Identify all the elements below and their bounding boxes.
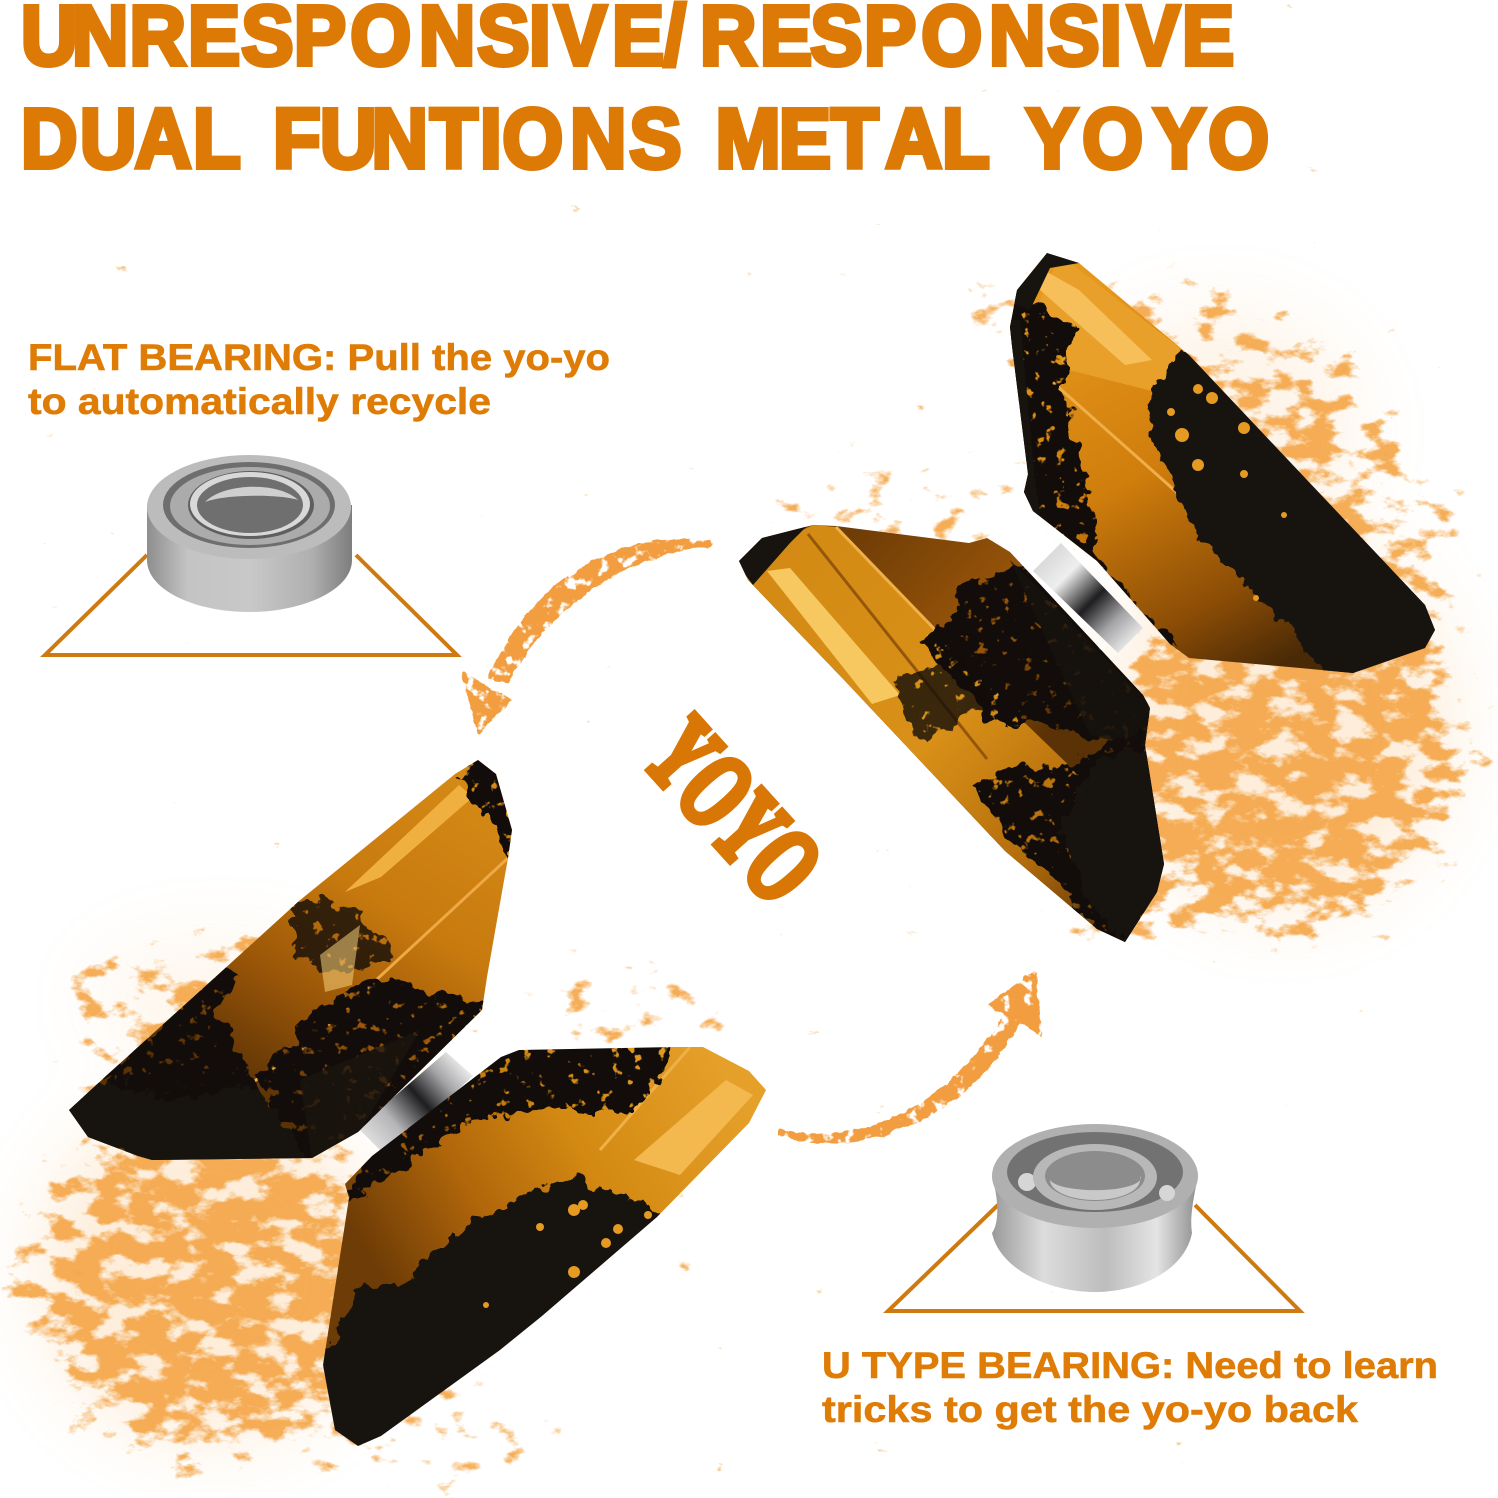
text: U type bearing description: [822, 1345, 1438, 1430]
icon: flat bearing: [147, 455, 352, 612]
text: U type bearing description: tricks to get the yo-yo back: [822, 1389, 1358, 1430]
text: flat bearing description: FLAT BEARING: Pull the yo-yo: [28, 337, 610, 378]
icon: U type bearing: [992, 1124, 1198, 1292]
arrow: upper circular arrow: [462, 539, 712, 735]
front half: [739, 525, 1164, 942]
triangle: U bearing stand: [888, 1205, 1300, 1311]
triangle: flat bearing stand: [45, 555, 457, 655]
orange wash behind splashes: [40, 310, 1450, 1440]
arrow: lower circular arrow: [778, 968, 1042, 1143]
yoyo: bottom left: [60, 750, 780, 1455]
text: flat bearing description: [28, 337, 610, 422]
title: DUAL FUNTIONS METAL YOYO: [21, 93, 1269, 186]
orange splash: bottom left: [20, 920, 740, 1490]
axle: [358, 1052, 473, 1156]
orange splash: top right: [750, 240, 1475, 960]
yoyo: top right: [730, 240, 1450, 955]
title: [21, 0, 1269, 186]
axle: [1033, 543, 1143, 653]
text: flat bearing description: to automatically recycle: [28, 381, 491, 422]
text: U type bearing description: U TYPE BEARING: Need to learn: [822, 1345, 1438, 1386]
back half: [1000, 240, 1450, 680]
back half: [60, 750, 520, 1170]
front half: [323, 1047, 766, 1446]
label: rotated YOYO: YOYO: [622, 696, 844, 925]
